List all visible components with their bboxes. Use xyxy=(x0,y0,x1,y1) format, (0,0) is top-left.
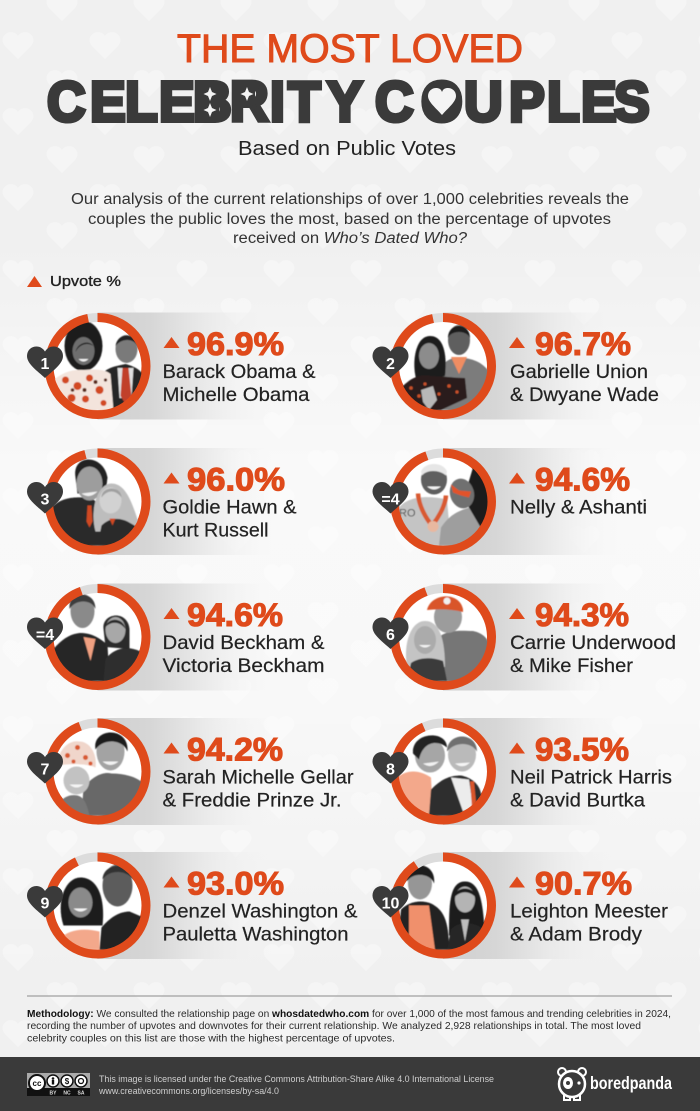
rank heart xyxy=(27,886,63,918)
rank heart: 10 xyxy=(382,896,400,912)
rank heart: 3 xyxy=(41,492,50,508)
rank heart: =4 xyxy=(36,627,54,644)
name: Goldie Hawn & xyxy=(162,496,296,518)
ring 94.6 xyxy=(394,453,492,550)
value: 94.2% xyxy=(187,732,283,768)
name xyxy=(162,900,358,946)
legend: upvote xyxy=(27,274,121,290)
value: 90.7% xyxy=(535,866,632,902)
photo xyxy=(52,460,142,546)
intro paragraph: Our analysis of the current relationships of over 1,000 celebrities reveals the xyxy=(71,191,629,208)
name: Gabrielle Union xyxy=(510,361,648,383)
legend: upvote: Upvote % xyxy=(50,274,121,290)
subtitle: Based on Public Votes xyxy=(238,138,456,160)
rank heart: =4 xyxy=(381,492,400,508)
name: Barack Obama & xyxy=(162,361,316,383)
name: Kurt Russell xyxy=(162,520,268,542)
rank heart: 1 xyxy=(41,356,50,373)
couple 1: Obama xyxy=(27,312,316,420)
name: Leighton Meester xyxy=(510,900,669,922)
name: Pauletta Washington xyxy=(162,924,348,946)
name xyxy=(162,496,296,542)
value: 96.9% xyxy=(187,326,284,362)
name: & Freddie Prinze Jr. xyxy=(162,790,342,812)
ring 96.9 xyxy=(49,318,146,414)
icon: creative commons badge: NC xyxy=(63,1090,71,1096)
name: Sarah Michelle Gellar xyxy=(162,766,354,788)
photo xyxy=(60,864,144,950)
ring 94.6 xyxy=(49,588,146,686)
value: 93.0% xyxy=(187,866,284,902)
title: celebrity couples xyxy=(47,69,650,133)
value: 96.7% xyxy=(535,326,631,362)
intro paragraph: received on Who’s Dated Who? xyxy=(233,230,467,247)
name xyxy=(162,632,324,677)
icon: creative commons badge: $ xyxy=(65,1077,70,1086)
logo: bored panda xyxy=(558,1068,672,1100)
name xyxy=(510,361,659,406)
intro paragraph: couples the public loves the most, based on the percentage of upvotes xyxy=(88,211,611,228)
name: Nelly & Ashanti xyxy=(510,496,647,518)
ring 94.3 xyxy=(394,588,492,686)
icon: stars in the B xyxy=(203,85,255,118)
ring 90.7 xyxy=(394,857,492,954)
rank heart xyxy=(372,346,408,378)
rank heart xyxy=(372,886,408,918)
couple 7: Gellar and Prinze xyxy=(27,718,354,825)
photo xyxy=(406,596,489,681)
name: Michelle Obama xyxy=(162,384,310,406)
name xyxy=(162,766,354,812)
photo: RO xyxy=(399,508,416,520)
intro paragraph xyxy=(71,191,629,247)
methodology note: celebrity couples on this list are those with the highest percentage of upvotes. xyxy=(27,1034,395,1044)
rank heart: 8 xyxy=(386,762,395,778)
photo xyxy=(397,735,485,816)
name: & Adam Brody xyxy=(510,924,642,946)
title: the most loved: THE MOST LOVED xyxy=(177,27,523,71)
word: celebrity: CELEBRITY xyxy=(47,69,363,133)
couple 5: Beckham xyxy=(27,584,324,690)
rank heart xyxy=(27,618,63,649)
methodology note: recording the number of upvotes and downvotes for their current relationship. We analyzed 2,928 relationships in total. The most loved xyxy=(27,1021,641,1032)
photo xyxy=(397,464,489,546)
name xyxy=(510,900,669,946)
name xyxy=(510,766,672,812)
methodology note: Methodology: We consulted the relationship page on whosdatedwho.com for over 1,000 of the most famous and trending celebrities in 2024, xyxy=(27,1009,671,1020)
ring 96.0 xyxy=(49,453,146,550)
name: Victoria Beckham xyxy=(162,655,324,677)
license text: This image is licensed under the Creative Commons Attribution-Share Alike 4.0 International License xyxy=(99,1074,494,1085)
name: & Mike Fisher xyxy=(510,655,634,677)
ring 93.5 xyxy=(394,723,492,820)
value: 96.0% xyxy=(187,462,285,498)
rank heart xyxy=(372,482,408,514)
rank heart xyxy=(372,752,408,784)
icon: heart in the O xyxy=(428,84,456,118)
value: 94.3% xyxy=(535,597,629,633)
name: & David Burtka xyxy=(510,790,645,812)
name: Carrie Underwood xyxy=(510,632,676,654)
name: Denzel Washington & xyxy=(162,900,358,922)
rank heart xyxy=(372,618,408,649)
name: & Dwyane Wade xyxy=(510,384,659,406)
photo xyxy=(54,732,144,816)
name xyxy=(510,632,676,677)
methodology note xyxy=(27,1009,671,1044)
value: 94.6% xyxy=(535,462,630,498)
photo xyxy=(397,865,485,950)
rank heart: 7 xyxy=(41,762,50,778)
footer bar xyxy=(0,1057,700,1111)
rank heart: 6 xyxy=(386,627,395,644)
icon: creative commons badge xyxy=(27,1073,90,1096)
rank heart: 9 xyxy=(41,896,50,912)
photo xyxy=(52,321,144,410)
rank heart xyxy=(27,346,63,378)
license text: www.creativecommons.org/licenses/by-sa/4.0 xyxy=(98,1086,279,1097)
rank heart xyxy=(27,482,63,514)
couple 6: Underwood and Fisher xyxy=(372,584,676,690)
couple 2: Union and Wade xyxy=(372,312,659,420)
word: couples: COUPLES xyxy=(375,69,650,133)
photo xyxy=(52,594,142,681)
ring 93.0 xyxy=(49,857,146,954)
value: 94.6% xyxy=(187,597,283,633)
icon: creative commons badge: BY xyxy=(50,1090,57,1096)
couple 3: Hawn and Russell xyxy=(27,448,296,555)
rank heart: 2 xyxy=(386,356,395,373)
icon: creative commons badge: cc xyxy=(33,1079,42,1088)
ring 96.7 xyxy=(394,318,492,414)
couple 8: Harris and Burtka xyxy=(372,718,672,825)
logo: bored panda: boredpanda xyxy=(590,1073,672,1093)
license text xyxy=(98,1074,494,1097)
photo xyxy=(397,325,489,410)
name: Neil Patrick Harris xyxy=(510,766,672,788)
name xyxy=(162,361,316,406)
couple 10: Meester and Brody xyxy=(372,852,669,959)
name: David Beckham & xyxy=(162,632,324,654)
couple 4: Nelly and Ashanti xyxy=(372,448,647,555)
icon: creative commons badge: SA xyxy=(78,1090,85,1096)
couple 9: Washington xyxy=(27,852,358,959)
value: 93.5% xyxy=(535,732,629,768)
ring 94.2 xyxy=(49,723,146,820)
rank heart xyxy=(27,752,63,784)
